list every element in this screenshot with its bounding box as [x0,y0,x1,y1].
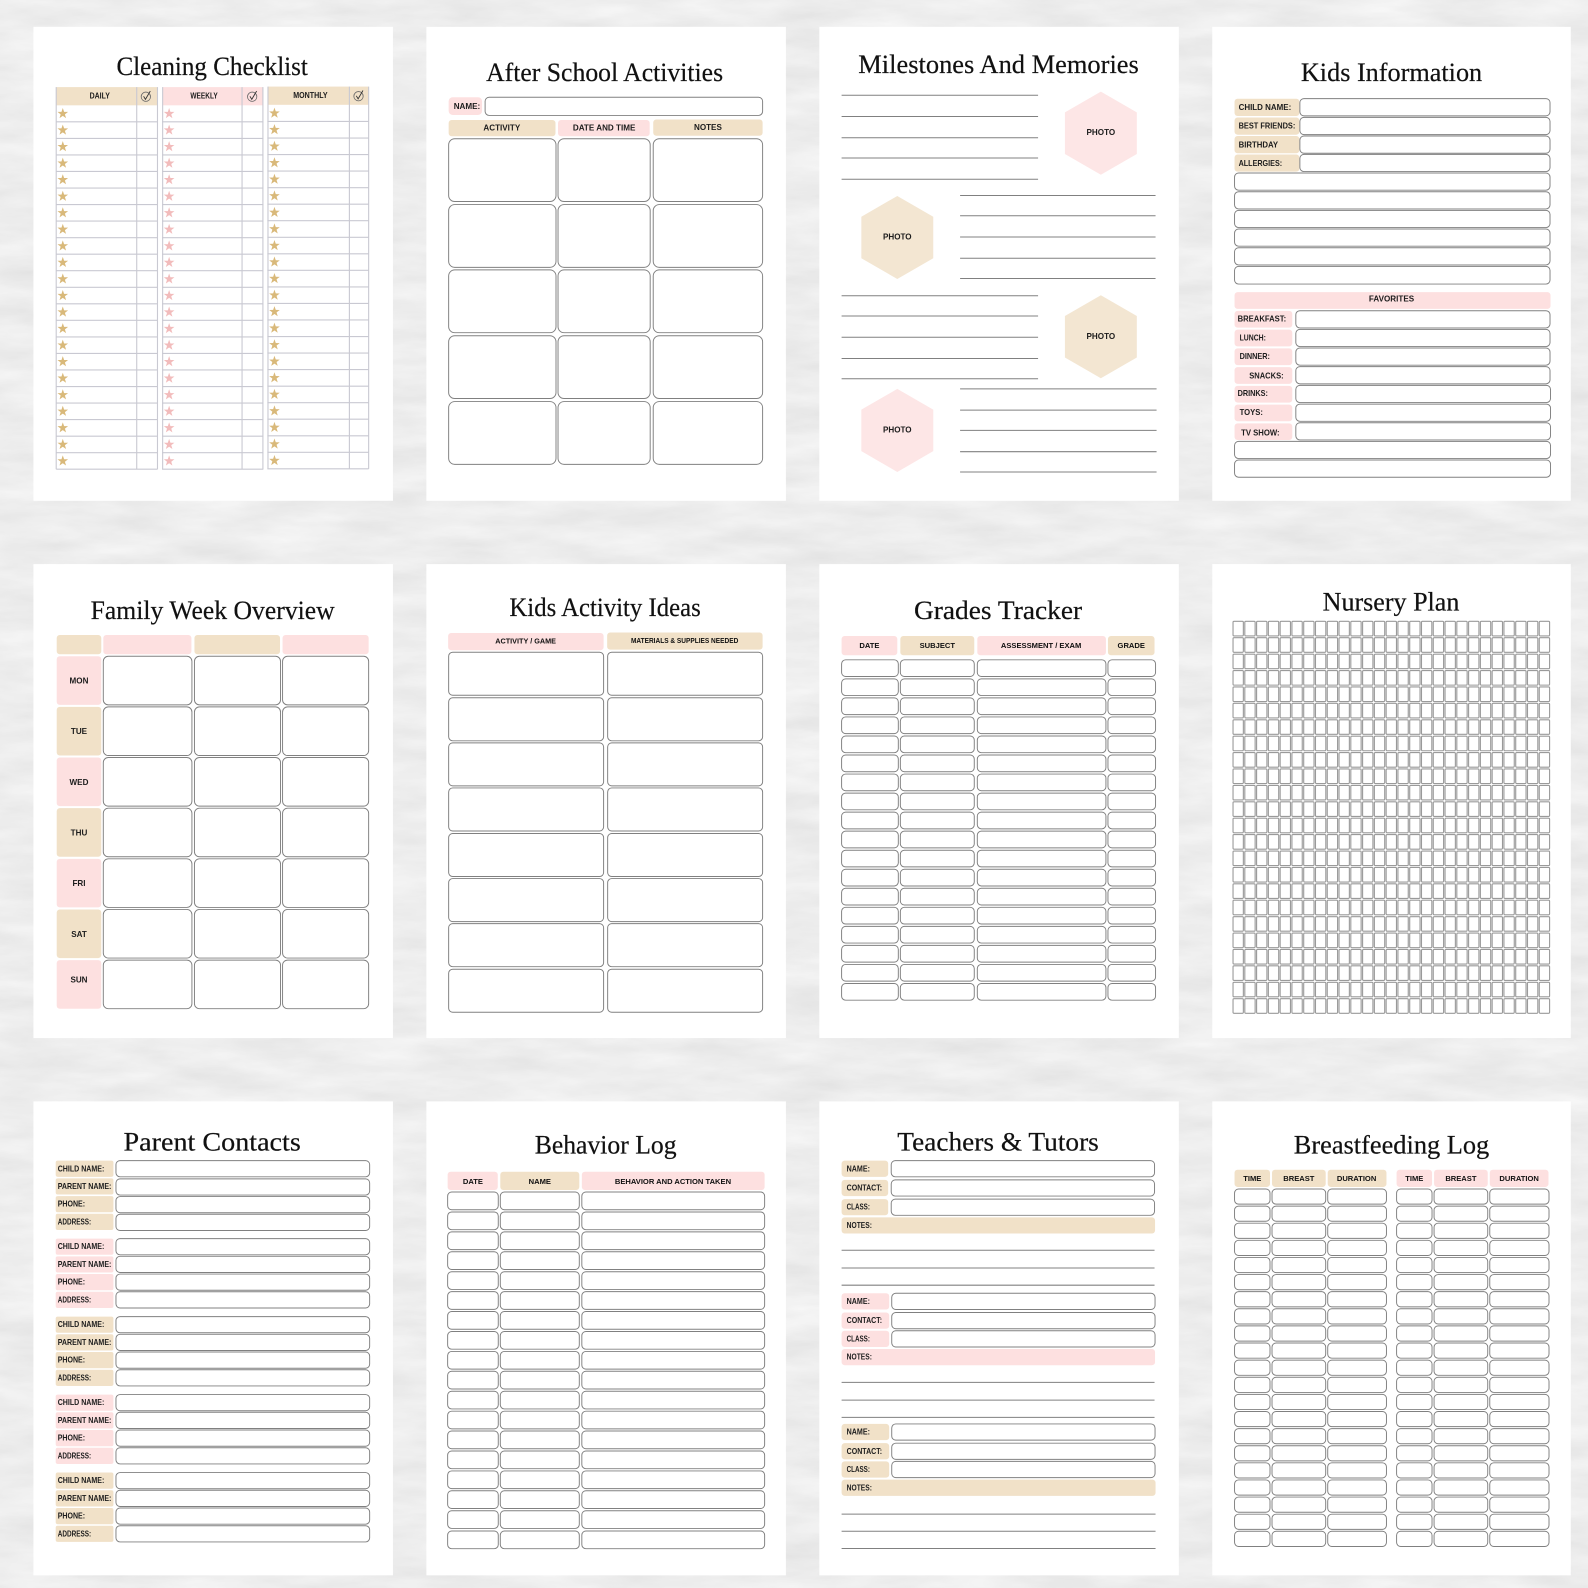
day labels: SUN [70,975,88,984]
contact group 4: ADDRESS: [58,1451,91,1460]
table headers: DURATION [1337,1174,1376,1183]
teacher block 1: CONTACT: [847,1183,882,1192]
photo hexagon beige [1065,295,1137,378]
lines group 1 [842,95,1038,179]
column: weekly [162,87,263,469]
photo hexagon pink: PHOTO [883,425,912,434]
column: daily [56,87,157,469]
contact group 2: ADDRESS: [58,1295,91,1304]
panel: Nursery Plan [1212,564,1571,1038]
panel: Family Week Overview [33,564,393,1038]
child details: CHILD NAME: [1239,103,1291,112]
contact group 2: CHILD NAME: [58,1242,104,1251]
teacher block 1: NOTES: [847,1221,872,1230]
teacher block 3 [842,1424,1156,1549]
title: After School Activities: After School Activities [486,58,723,87]
title: Cleaning Checklist: Cleaning Checklist [116,52,309,81]
day labels: THU [71,829,87,838]
day labels: WED [70,778,89,787]
favorites rows [1235,311,1551,477]
teacher block 3: CONTACT: [847,1447,882,1456]
favorites rows: DINNER: [1240,352,1270,361]
contact group 1: ADDRESS: [58,1217,91,1226]
teacher block 2: CONTACT: [847,1316,882,1325]
panel: Breastfeeding Log [1212,1101,1571,1575]
panel: Parent Contacts [33,1101,393,1575]
contact group 1: PHONE: [58,1200,85,1209]
panel: Cleaning Checklist [33,27,393,501]
header bands [57,635,369,654]
lines group 2 [960,195,1156,279]
photo hexagon beige: PHOTO [883,233,912,242]
teacher block 3: NOTES: [847,1483,872,1492]
teacher block 3: NAME: [847,1428,870,1437]
column: weekly: WEEKLY [190,92,218,101]
photo hexagon pink [1065,92,1137,175]
photo hexagon beige: PHOTO [1087,332,1115,341]
grades grid [842,660,1156,1000]
title: Milestones And Memories: Milestones And Memories [858,50,1139,79]
favorites rows: DRINKS: [1238,389,1268,398]
day labels: MON [70,677,89,686]
lines group 3 [842,296,1038,379]
title: Family Week Overview: Family Week Overview [91,596,335,625]
column: monthly [267,87,369,469]
contact group 3 [56,1317,370,1386]
panel: After School Activities [426,27,786,501]
ideas grid [449,652,763,1012]
photo hexagon pink [861,389,933,472]
contact group 4: CHILD NAME: [58,1398,104,1407]
title: Kids Information: Kids Information [1301,58,1482,87]
contact group 4 [56,1395,370,1464]
table headers: DATE [463,1177,483,1186]
feeding grid [1235,1189,1549,1546]
contact group 5: PARENT NAME: [58,1494,111,1503]
table headers: BREAST [1283,1174,1315,1183]
contact group 4: PARENT NAME: [58,1416,111,1425]
table headers: BEHAVIOR AND ACTION TAKEN [615,1177,731,1186]
activity grid [449,139,763,464]
panel: Grades Tracker [819,564,1179,1038]
table headers: SUBJECT [920,641,955,650]
contact group 2: PARENT NAME: [58,1260,111,1269]
behavior grid [448,1192,765,1549]
panel: Milestones And Memories [819,27,1179,501]
table headers [449,120,763,136]
contact group 2 [56,1239,370,1308]
teacher block 1: NAME: [847,1164,870,1173]
title: Teachers & Tutors: Teachers & Tutors [897,1127,1099,1156]
contact group 3: CHILD NAME: [58,1320,104,1329]
title: Behavior Log: Behavior Log [535,1131,677,1160]
week grid [103,656,369,1009]
photo hexagon beige [861,196,933,279]
day labels [57,656,101,1009]
day labels: TUE [71,727,88,736]
contact group 1: CHILD NAME: [58,1164,104,1173]
day labels: SAT [71,930,87,939]
contact group 1 [56,1161,370,1230]
child details: BEST FRIENDS: [1239,122,1295,131]
table headers: ASSESSMENT / EXAM [1001,641,1081,650]
table headers: ACTIVITY [483,124,521,133]
favorites rows: LUNCH: [1240,333,1266,342]
favorites rows: TV SHOW: [1241,428,1280,437]
title: Grades Tracker: Grades Tracker [914,596,1082,625]
contact group 3: ADDRESS: [58,1373,91,1382]
teacher block 1: CLASS: [847,1203,870,1212]
table headers: MATERIALS & SUPPLIES NEEDED [631,636,739,645]
title: Nursery Plan: Nursery Plan [1323,588,1459,617]
panel: Kids Information [1212,27,1571,501]
table headers [842,636,1155,655]
planning grid [1233,621,1550,1013]
table headers: NAME [529,1177,551,1186]
table headers: BREAST [1445,1174,1477,1183]
panel: Teachers & Tutors [819,1101,1179,1575]
name row: NAME: [454,102,480,111]
table headers: DURATION [1499,1174,1539,1183]
column: daily: DAILY [90,92,110,101]
table headers [448,1172,765,1190]
contact group 4: PHONE: [58,1434,85,1443]
contact group 2: PHONE: [58,1278,85,1287]
contact group 5 [56,1473,370,1542]
contact group 3: PARENT NAME: [58,1338,111,1347]
table headers: TIME [1405,1174,1423,1183]
teacher block 2: NAME: [847,1297,870,1306]
teacher block 2: CLASS: [847,1334,870,1343]
lines group 4 [960,389,1157,472]
panel: Kids Activity Ideas [426,564,786,1038]
column: monthly: MONTHLY [293,91,328,100]
title: Kids Activity Ideas: Kids Activity Ideas [509,593,701,622]
table headers [448,632,763,650]
table headers: TIME [1243,1174,1261,1183]
table headers: DATE [859,641,879,650]
table headers [1235,1170,1549,1187]
favorites band [1235,292,1551,309]
contact group 3: PHONE: [58,1356,85,1365]
favorites rows: TOYS: [1240,408,1263,417]
name row [449,97,763,115]
teacher block 2: NOTES: [847,1353,872,1362]
favorites band: FAVORITES [1369,295,1415,304]
child details: ALLERGIES: [1239,159,1282,168]
day labels: FRI [72,879,86,888]
table headers: DATE AND TIME [573,124,636,133]
favorites rows: SNACKS: [1249,371,1284,380]
contact group 1: PARENT NAME: [58,1182,111,1191]
child details: BIRTHDAY [1239,140,1279,149]
table headers: GRADE [1118,641,1145,650]
contact group 5: PHONE: [58,1512,85,1521]
photo hexagon pink: PHOTO [1087,128,1115,137]
favorites rows: BREAKFAST: [1238,315,1286,324]
contact group 5: CHILD NAME: [58,1476,104,1485]
panel: Behavior Log [426,1101,786,1575]
title: Parent Contacts: Parent Contacts [124,1127,301,1156]
child details [1235,99,1550,284]
teacher block 2 [842,1293,1155,1417]
contact group 5: ADDRESS: [58,1529,91,1538]
table headers: NOTES [694,123,722,132]
table headers: ACTIVITY / GAME [495,637,556,646]
title: Breastfeeding Log: Breastfeeding Log [1294,1131,1489,1160]
teacher block 3: CLASS: [847,1465,870,1474]
teacher block 1 [842,1161,1155,1285]
